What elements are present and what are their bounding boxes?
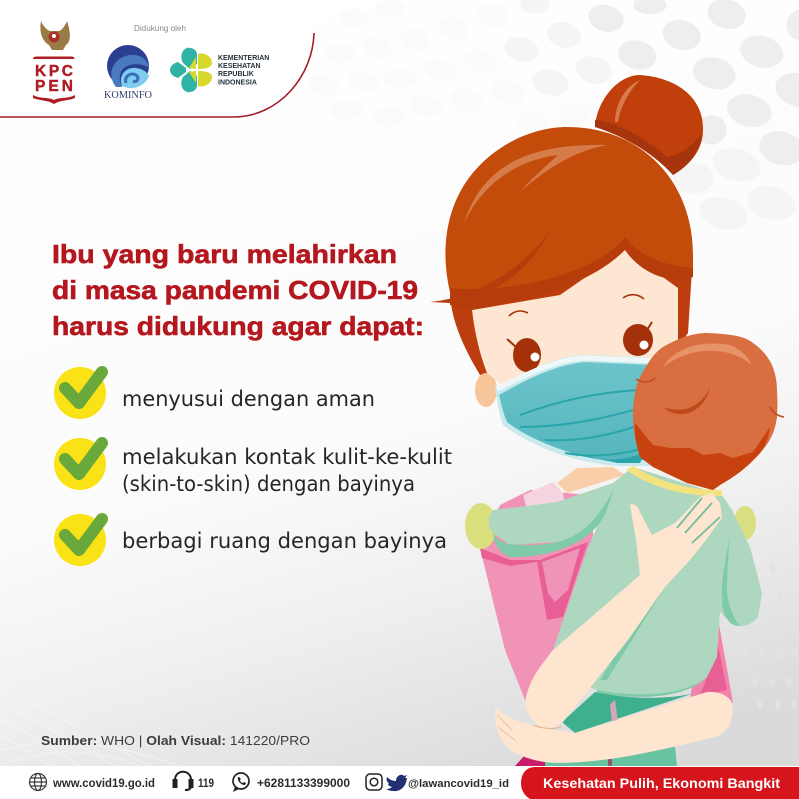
logo: Kominfo: [104, 45, 152, 101]
baby collar: [626, 466, 722, 496]
ministry wordmark: INDONESIA: [218, 80, 257, 86]
icon: globe: [30, 774, 46, 790]
checklist item 3: berbagi ruang dengan bayinya: [122, 529, 447, 553]
ministry wordmark: KESEHATAN: [218, 63, 261, 70]
face mask: [495, 355, 660, 466]
icon: check: [54, 367, 106, 419]
icon: garuda emblem: [40, 21, 70, 50]
heading: Ibu yang baru melahirkan: [52, 239, 397, 269]
ministry wordmark: KEMENTERIAN: [218, 55, 269, 62]
checklist item 2: (skin-to-skin) dengan bayinya: [122, 472, 415, 496]
checklist item 1: [54, 367, 375, 419]
ear: [475, 373, 497, 407]
header panel: [0, 0, 314, 117]
face: [472, 250, 678, 400]
PEN text: PEN: [35, 78, 73, 95]
checklist item 1: menyusui dengan aman: [122, 387, 375, 411]
mother jacket: [480, 490, 733, 705]
phone number: +6281133399000: [257, 778, 350, 790]
logo: KPC PEN: [33, 21, 75, 104]
eye right: [623, 322, 653, 356]
heading: di masa pandemi COVID-19: [52, 275, 418, 305]
pants: [562, 690, 703, 733]
hair front: [430, 127, 693, 310]
checklist item 2: melakukan kontak kulit-ke-kulit: [122, 445, 452, 469]
source line: Sumber: WHO | Olah Visual: 141220/PRO: [41, 734, 310, 748]
slogan pill: Kesehatan Pulih, Ekonomi Bangkit: [543, 775, 780, 791]
illustration: mother and baby: [430, 75, 784, 766]
book base: [33, 95, 75, 104]
lower-right dot texture: [742, 563, 797, 710]
ministry wordmark: REPUBLIK: [218, 71, 254, 78]
halftone dot pattern: [305, 0, 799, 235]
icon: check: [54, 438, 106, 490]
baby head: [633, 333, 784, 490]
icon: check: [54, 514, 106, 566]
heading: harus didukung agar dapat:: [52, 311, 424, 341]
icon: twitter: [386, 775, 407, 791]
mother hair back: [450, 220, 693, 375]
KPC text: KPC: [35, 63, 73, 80]
book top bar: [33, 56, 74, 59]
supported by label: Didukung oleh: [134, 24, 186, 33]
checklist item 2: [54, 438, 452, 496]
hair bun: [595, 75, 703, 175]
helpline: 119: [198, 778, 214, 790]
heading: [52, 239, 424, 341]
arm and hand under baby: [495, 692, 733, 763]
eye left: [507, 338, 541, 372]
icon: instagram: [366, 774, 382, 790]
lower-left wave texture: [0, 690, 180, 766]
cuff left: [465, 503, 497, 549]
baby body: [488, 467, 762, 697]
slogan pill: [521, 767, 799, 799]
mother neck: [557, 467, 625, 493]
cuff right: [734, 506, 756, 540]
checklist item 3: [54, 514, 447, 566]
arm and hand on baby back: [525, 493, 722, 729]
social handle: @lawancovid19_id: [408, 778, 509, 790]
website: www.covid19.go.id: [52, 778, 155, 790]
logo: Kementerian Kesehatan: [170, 48, 271, 92]
icon: headset: [174, 772, 192, 790]
eyebrows: [509, 295, 644, 316]
light pink sleeve detail: [523, 482, 565, 510]
icon: whatsapp: [233, 773, 249, 792]
Kominfo wordmark: KOMINFO: [104, 90, 152, 101]
footer bar: [0, 766, 799, 799]
